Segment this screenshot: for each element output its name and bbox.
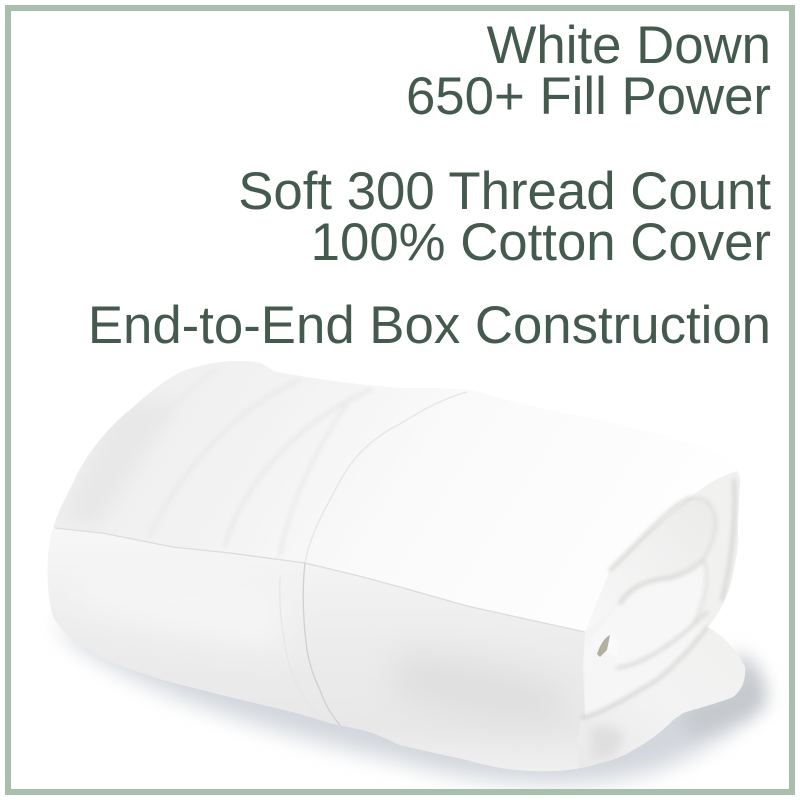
shading on top panel bbox=[340, 391, 367, 408]
illustration: rolled white comforter bbox=[48, 361, 775, 789]
front panel bbox=[55, 528, 585, 758]
heading: thread count cotton cover: Soft 300 Thread Count bbox=[238, 162, 771, 221]
comforter body bbox=[40, 350, 760, 780]
quilting seam: top diagonal bbox=[305, 392, 467, 563]
heading: white down fill power: 650+ Fill Power bbox=[406, 67, 771, 126]
second inner roll bbox=[590, 560, 706, 665]
outer fold band bbox=[691, 472, 740, 498]
heading: white down fill power: White Down bbox=[487, 16, 771, 75]
fold creases bbox=[582, 480, 734, 718]
icon: tie tab bbox=[597, 635, 610, 657]
floor shadow bbox=[52, 622, 766, 784]
third inner roll bbox=[585, 625, 712, 717]
heading: white down fill power bbox=[406, 16, 771, 126]
bottom fold bbox=[596, 679, 744, 764]
rolled end folds bbox=[578, 470, 750, 775]
seam: horizontal stitching bbox=[55, 528, 585, 632]
first inner roll bbox=[688, 502, 712, 528]
seam: front vertical bbox=[303, 563, 340, 725]
heading: thread count cotton cover: 100% Cotton Cover bbox=[311, 213, 771, 272]
heading: box construction: End-to-End Box Construction bbox=[88, 296, 771, 355]
heading: thread count cotton cover bbox=[238, 162, 771, 272]
top panel bbox=[66, 392, 737, 631]
